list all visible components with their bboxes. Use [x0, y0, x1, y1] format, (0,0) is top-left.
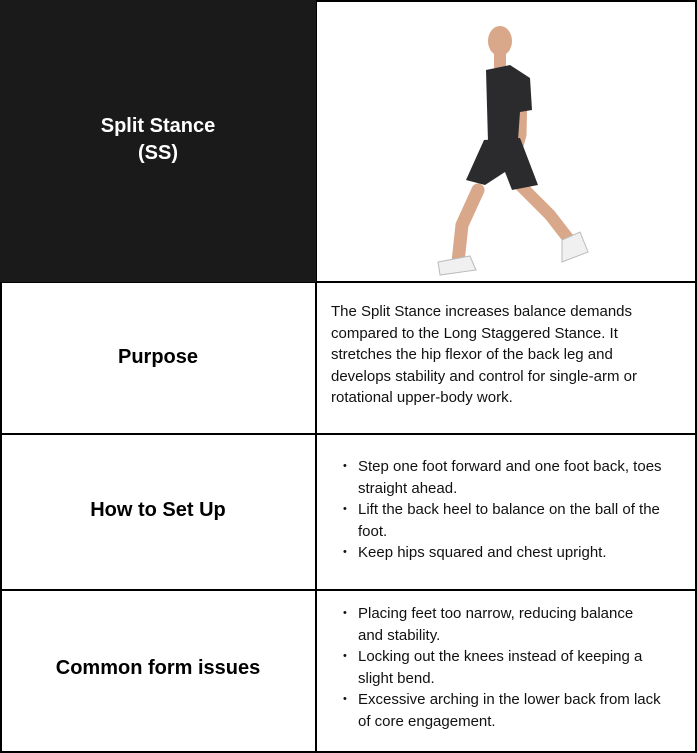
- setup list: [343, 458, 662, 561]
- title cell: Split Stance: [101, 115, 215, 137]
- purpose text: The Split Stance increases balance demands compared to the Long Staggered Stance. It stretches the hip flexor of the back leg and develops stability and control for single-arm or rotational upper-body work.: [331, 303, 637, 406]
- setup list: Step one foot forward and one foot back, toes straight ahead.: [358, 458, 662, 496]
- setup heading: How to Set Up: [90, 498, 226, 520]
- setup list: Lift the back heel to balance on the ball of the foot.: [358, 501, 660, 540]
- title cell: (SS): [138, 142, 178, 164]
- title cell: [0, 0, 316, 282]
- form issues heading: Common form issues: [56, 656, 260, 678]
- form issues list: Excessive arching in the lower back from lack of core engagement.: [358, 691, 661, 730]
- form issues list: [343, 605, 661, 730]
- form issues list: Placing feet too narrow, reducing balance and stability.: [358, 605, 633, 644]
- form issues list: Locking out the knees instead of keeping a slight bend.: [358, 648, 642, 686]
- purpose heading: Purpose: [118, 346, 198, 368]
- image: person in split stance: [438, 26, 588, 276]
- setup list: Keep hips squared and chest upright.: [358, 544, 607, 561]
